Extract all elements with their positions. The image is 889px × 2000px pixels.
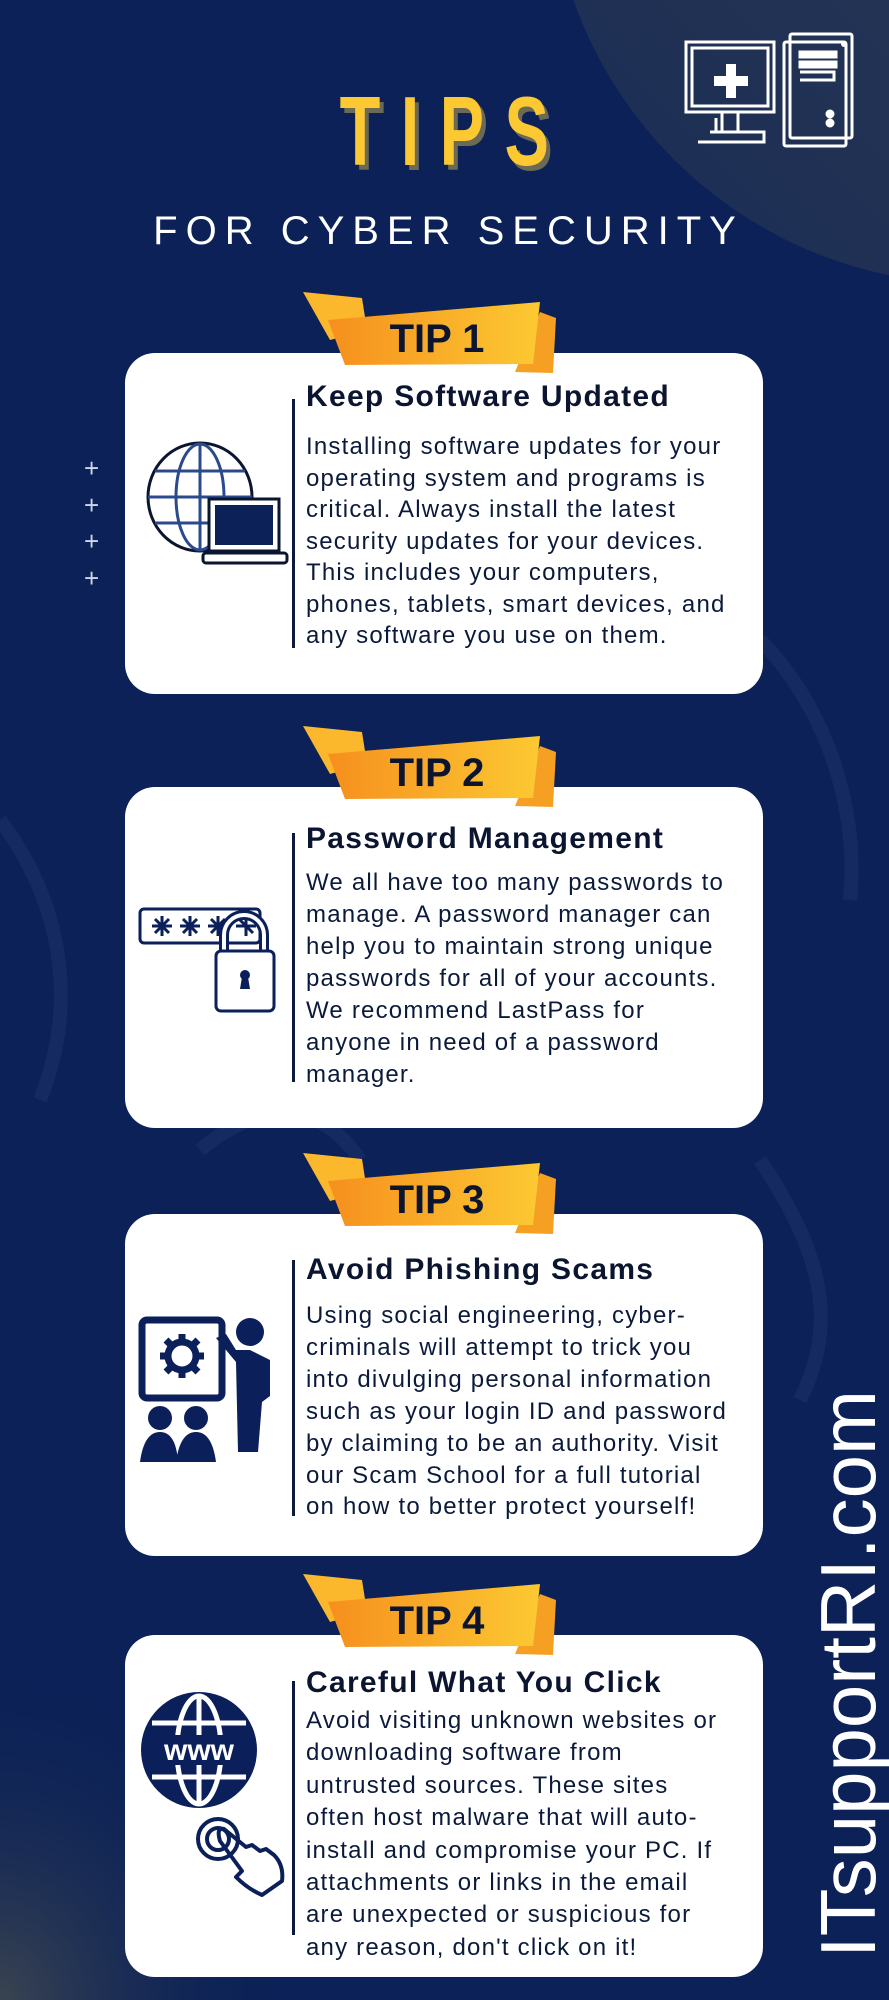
icon: presenter [138, 1316, 270, 1462]
body text: install and compromise your PC. If [306, 1837, 712, 1864]
heading: Careful What You Click [306, 1666, 662, 1699]
body text [306, 869, 724, 1088]
heading: Keep Software Updated [306, 380, 670, 413]
icon: www globe and hand: www [163, 1734, 235, 1767]
ribbon: TIP 1 [303, 292, 556, 373]
body text: downloading software from [306, 1739, 623, 1766]
body text: any software you use on them. [306, 622, 668, 649]
body text: We recommend LastPass for [306, 997, 645, 1024]
icon: computer [684, 32, 854, 148]
icon: globe laptop [146, 442, 288, 564]
title: TIPS: TIPS [340, 76, 569, 186]
body text: Avoid visiting unknown websites or [306, 1707, 717, 1734]
body text: Using social engineering, cyber- [306, 1302, 686, 1329]
body text [306, 433, 726, 649]
body text: anyone in need of a password [306, 1029, 660, 1056]
decorative plus signs: + [84, 562, 99, 592]
body text: attachments or links in the email [306, 1869, 688, 1896]
subtitle: FOR CYBER SECURITY [153, 209, 744, 253]
body text: operating system and programs is [306, 464, 706, 492]
body text: criminals will attempt to trick you [306, 1334, 692, 1361]
panel: tip 1 [125, 353, 763, 694]
body text: into divulging personal information [306, 1366, 712, 1393]
body text: by claiming to be an authority. Visit [306, 1430, 719, 1457]
body text: such as your login ID and password [306, 1398, 727, 1425]
ribbon: TIP 2 [303, 726, 556, 807]
icon: password lock [138, 908, 276, 1012]
ribbon: TIP 4: TIP 4 [390, 1599, 485, 1643]
body text [306, 1707, 717, 1961]
body text: manage. A password manager can [306, 901, 712, 928]
body text: help you to maintain strong unique [306, 933, 714, 960]
body text: passwords for all of your accounts. [306, 965, 718, 992]
decorative plus signs [84, 453, 99, 592]
body text: our Scam School for a full tutorial [306, 1462, 702, 1489]
body text: security updates for your devices. [306, 528, 704, 554]
panel: tip 4 [125, 1635, 763, 1977]
ribbon: TIP 3 [303, 1153, 556, 1234]
body text: critical. Always install the latest [306, 496, 676, 523]
body text: manager. [306, 1061, 416, 1088]
body text: We all have too many passwords to [306, 869, 724, 896]
ribbon: TIP 1: TIP 1 [390, 317, 484, 361]
body text: are unexpected or suspicious for [306, 1901, 691, 1928]
body text: phones, tablets, smart devices, and [306, 590, 726, 618]
panel: tip 3 [125, 1214, 763, 1556]
ribbon: TIP 3: TIP 3 [390, 1178, 484, 1222]
heading: Password Management [306, 822, 664, 855]
decorative plus signs: + [84, 490, 99, 520]
body text: untrusted sources. These sites [306, 1772, 668, 1799]
decorative plus signs: + [84, 453, 99, 483]
body text: any reason, don't click on it! [306, 1934, 637, 1961]
body text: on how to better protect yourself! [306, 1493, 696, 1520]
heading: Avoid Phishing Scams [306, 1253, 654, 1286]
body text: often host malware that will auto- [306, 1804, 698, 1831]
panel: tip 2 [125, 787, 763, 1128]
ribbon: TIP 2: TIP 2 [390, 751, 484, 795]
body text: Installing software updates for your [306, 433, 721, 460]
decorative plus signs: + [84, 526, 99, 556]
body text: This includes your computers, [306, 559, 660, 586]
body text [306, 1302, 727, 1520]
icon: www globe and hand [141, 1692, 284, 1897]
ribbon: TIP 4 [303, 1574, 556, 1655]
